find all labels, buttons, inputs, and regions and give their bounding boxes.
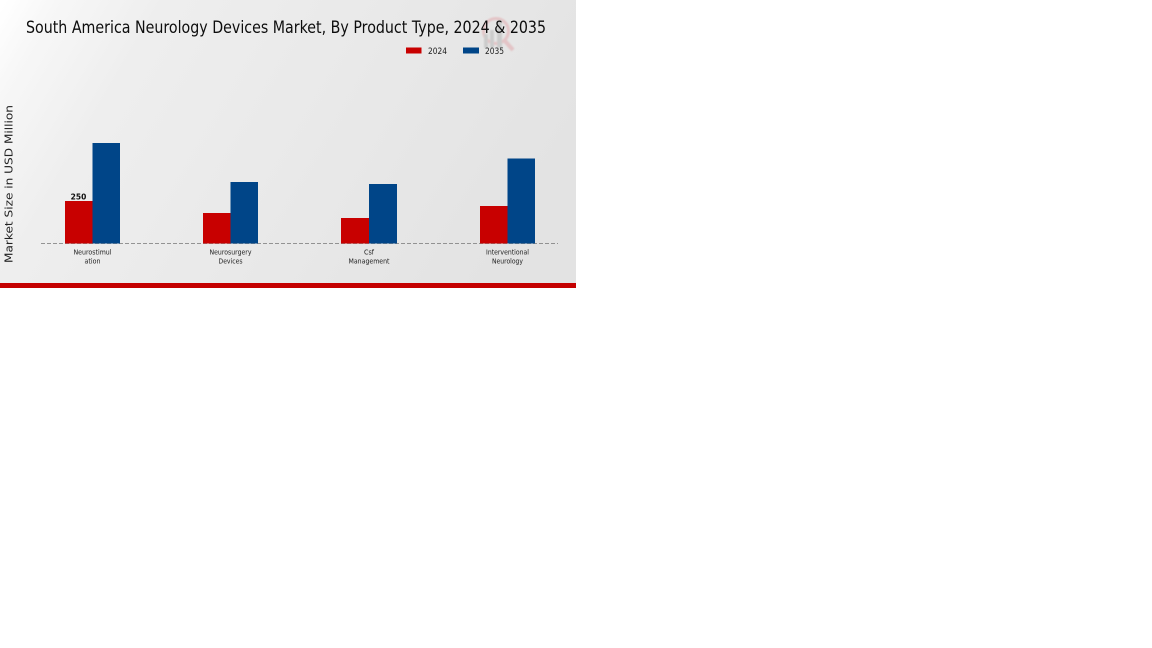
panel: chart background [0,0,576,283]
icon: watermark magnifier [484,18,513,50]
footer bar [0,283,576,288]
category label: Neurostimulation: Neurostimul [74,248,112,256]
bar: Csf Management 2024 [341,218,369,244]
bar: Neurosurgery 2024 [203,213,230,244]
bar group: Interventional Neurology [480,158,535,266]
bar: Neurostimulation 2024 [65,201,92,244]
bar group: Neurosurgery Devices [203,182,258,266]
bar: Interventional Neurology 2024 [480,206,508,244]
legend [406,47,504,57]
bar: Neurostimulation 2035 [92,143,120,244]
value label: 250: 250 [71,192,86,202]
category label: Neurostimulation: ation [84,258,100,266]
category label: Interventional Neurology: Interventional [486,248,529,256]
y axis label: Market Size in USD Million [4,105,16,263]
legend item: 2035: 2035 [485,47,504,57]
bar: Interventional Neurology 2035 [508,158,535,244]
bar: Csf Management 2035 [369,184,397,244]
category label: Interventional Neurology: Neurology [492,258,523,266]
category label: Neurosurgery Devices: Neurosurgery [210,248,252,256]
bar group: Csf Management [341,184,397,266]
bar group: Neurostimulation [65,143,120,266]
title: South America Neurology Devices Market, By Product Type, 2024 & 2035 [26,18,546,38]
bar: Neurosurgery 2035 [230,182,258,244]
category label: Neurosurgery Devices: Devices [218,258,243,266]
legend item: 2024: 2024 [428,47,447,57]
baseline [41,242,558,244]
category label: Csf Management: Management [348,258,390,266]
category label: Csf Management: Csf [364,248,374,256]
